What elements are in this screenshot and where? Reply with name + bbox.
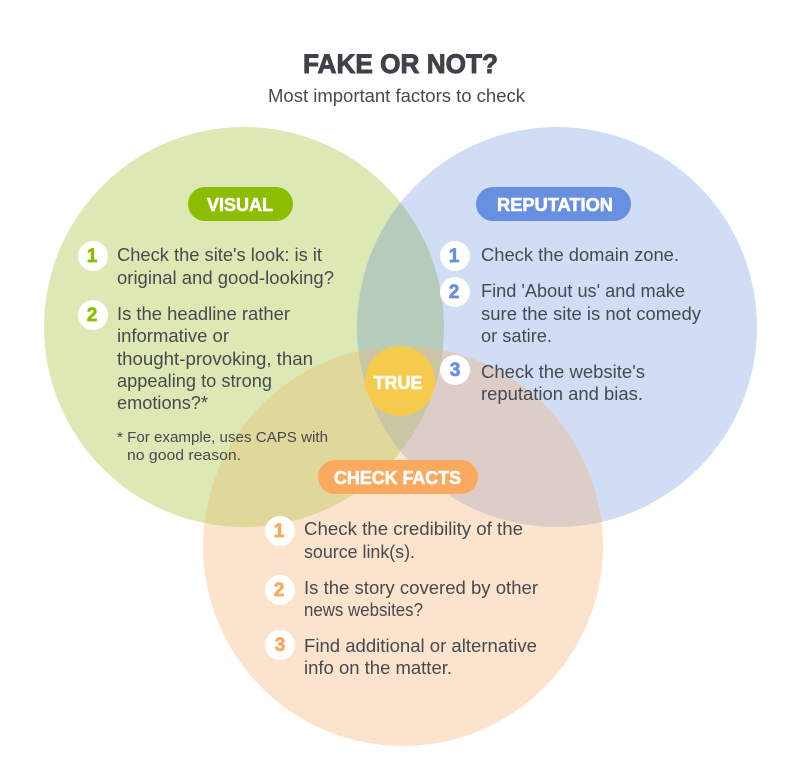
reputation item 2 text: sure the site is not comedy [481, 304, 701, 324]
check facts item 3 number: 3 [275, 635, 285, 656]
true centre badge: TRUE [374, 372, 422, 393]
reputation item 3 text: reputation and bias. [481, 384, 643, 404]
subtitle: Most important factors to check [268, 86, 526, 106]
check facts item 1 number: 1 [274, 521, 285, 542]
reputation heading pill [476, 187, 631, 221]
panel: reputation [440, 187, 701, 404]
visual item 2 number: 2 [87, 305, 97, 326]
overlap: visual and reputation [357, 202, 444, 351]
check facts item 2 text: news websites? [304, 600, 423, 620]
reputation item 3 text: Check the website's [481, 362, 645, 382]
visual item 2 text: Is the headline rather [117, 304, 290, 324]
visual item 2 number [78, 300, 108, 330]
overlap: visual and check facts [204, 351, 400, 527]
panel: visual [78, 187, 334, 464]
visual heading pill [188, 187, 293, 221]
visual item 1 text: Check the site's look: is it [117, 245, 322, 265]
visual item 2 text: thought-provoking, than [117, 349, 313, 369]
check facts item 3 text: info on the matter. [304, 658, 452, 678]
reputation item 1 text: Check the domain zone. [481, 245, 679, 265]
reputation item 1 number [440, 241, 470, 271]
check facts item 3 text [304, 636, 537, 678]
reputation item 3 number [440, 355, 470, 385]
visual item 2 text [117, 304, 313, 413]
check facts item 3 number [265, 630, 295, 660]
visual item 2 text: appealing to strong [117, 371, 272, 391]
visual item 1 number [78, 241, 108, 271]
reputation item 1 number: 1 [449, 246, 460, 267]
check facts item 1 text [304, 519, 523, 562]
check facts heading pill: CHECK FACTS [334, 467, 461, 488]
overlap: reputation and check facts [358, 350, 602, 527]
check facts item 2 text [304, 578, 538, 620]
reputation item 2 number [440, 277, 470, 307]
venn diagram [44, 127, 757, 746]
visual heading pill: VISUAL [207, 194, 273, 215]
check facts item 1 text: Check the credibility of the [304, 519, 523, 539]
true centre badge [365, 346, 435, 416]
reputation item 2 text: Find 'About us' and make [481, 281, 685, 301]
check facts item 2 text: Is the story covered by other [304, 578, 538, 598]
reputation item 2 text [481, 281, 701, 346]
visual item 2 text: emotions?* [117, 393, 208, 413]
reputation item 2 text: or satire. [481, 326, 552, 346]
visual item 1 text [117, 245, 334, 288]
check facts item 2 number [265, 575, 295, 605]
check facts item 2 number: 2 [274, 580, 284, 601]
reputation item 3 text [481, 362, 645, 404]
reputation heading pill: REPUTATION [497, 194, 613, 215]
check facts item 1 text: source link(s). [304, 542, 415, 562]
check facts item 3 text: Find additional or alternative [304, 636, 537, 656]
visual footnote: no good reason. [127, 447, 241, 464]
visual item 1 text: original and good-looking? [117, 268, 334, 288]
visual item 2 text: informative or [117, 326, 229, 346]
reputation item 3 number: 3 [450, 360, 460, 381]
circle: visual [44, 127, 444, 527]
reputation item 2 number: 2 [449, 282, 459, 303]
overlap: all three [358, 346, 442, 452]
visual footnote [117, 429, 328, 464]
check facts item 1 number [265, 516, 295, 546]
visual footnote: * For example, uses CAPS with [117, 429, 328, 446]
circle: check facts [203, 346, 603, 746]
visual item 1 number: 1 [87, 246, 98, 267]
title: FAKE OR NOT? [303, 49, 498, 79]
check facts heading pill [318, 460, 478, 494]
circle: reputation [357, 127, 757, 527]
panel: check facts [265, 460, 538, 678]
